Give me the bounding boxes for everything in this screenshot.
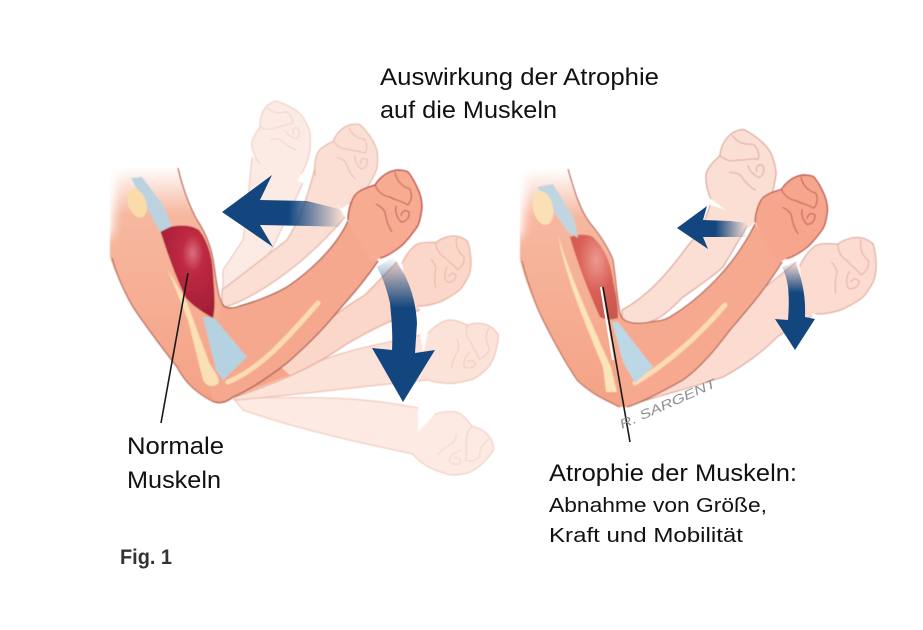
humerus bone: [168, 270, 219, 386]
lower tendon: [203, 317, 247, 380]
left arm illustration: normal muscle: [96, 93, 509, 490]
label: muscle atrophy: Kraft und Mobilität: [549, 525, 744, 547]
label: muscle atrophy: Abnahme von Größe,: [549, 495, 767, 517]
left arrow: reduced flexion: [677, 206, 747, 249]
lower tendon: [612, 322, 653, 383]
main arm: upper arm outline: [112, 168, 222, 401]
ghost arm: slightly lowered position: [235, 222, 480, 397]
main arm: fist: [348, 170, 422, 262]
label: muscle atrophy: Atrophie der Muskeln:: [549, 460, 797, 487]
down arrow: extension: [372, 257, 435, 402]
main arm: upper arm: [110, 167, 290, 403]
main arm: upper arm: [520, 169, 690, 407]
label: normal muscles: [127, 433, 224, 494]
ghost arm: lowered position: [640, 220, 887, 402]
title: auf die Muskeln: [380, 97, 557, 124]
main arm: fist: [755, 175, 828, 262]
biceps muscle: normal size: [160, 226, 215, 318]
soft fade on upper arm left edge: [96, 150, 120, 245]
humerus bone: [558, 235, 617, 392]
artist signature: R. SARGENT: [617, 375, 719, 432]
ghost arm: raised position: [622, 122, 796, 324]
ghost arm: top raised position: [223, 93, 332, 292]
shoulder bone end: [530, 189, 556, 227]
label: normal muscles: Normale: [127, 433, 224, 460]
right arm illustration: atrophied muscle: [506, 122, 887, 407]
main arm: forearm outline: [212, 221, 378, 403]
main arm: upper arm outline: [522, 169, 620, 407]
upper tendon: [131, 177, 172, 232]
white highlight beside leader line: [601, 287, 613, 360]
left arrow: flexion: [222, 175, 343, 247]
figure label: Fig. 1: [120, 546, 172, 569]
ghost arm: upper raised position: [222, 121, 386, 308]
ghost arm: low position: [235, 298, 509, 407]
soft fade on upper arm left edge: [506, 150, 530, 245]
biceps muscle: atrophied: [570, 235, 618, 319]
leader line: atrophied muscle: [603, 287, 630, 442]
label: normal muscles: Muskeln: [127, 467, 221, 494]
leader line: normal muscle: [161, 273, 188, 423]
title: Auswirkung der Atrophie: [380, 64, 659, 91]
forearm bone highlight: [635, 305, 725, 383]
main arm: forearm fill: [210, 221, 378, 403]
shoulder bone end: [123, 186, 151, 220]
ghost arm: lower bottom position: [233, 397, 499, 490]
forearm bone highlight: [228, 303, 318, 382]
main arm: forearm outline: [620, 224, 782, 407]
main arm: forearm fill: [615, 224, 782, 407]
label: muscle atrophy: [549, 460, 797, 547]
title: [380, 64, 659, 124]
down arrow: reduced extension: [775, 262, 815, 350]
upper tendon: [537, 184, 578, 238]
